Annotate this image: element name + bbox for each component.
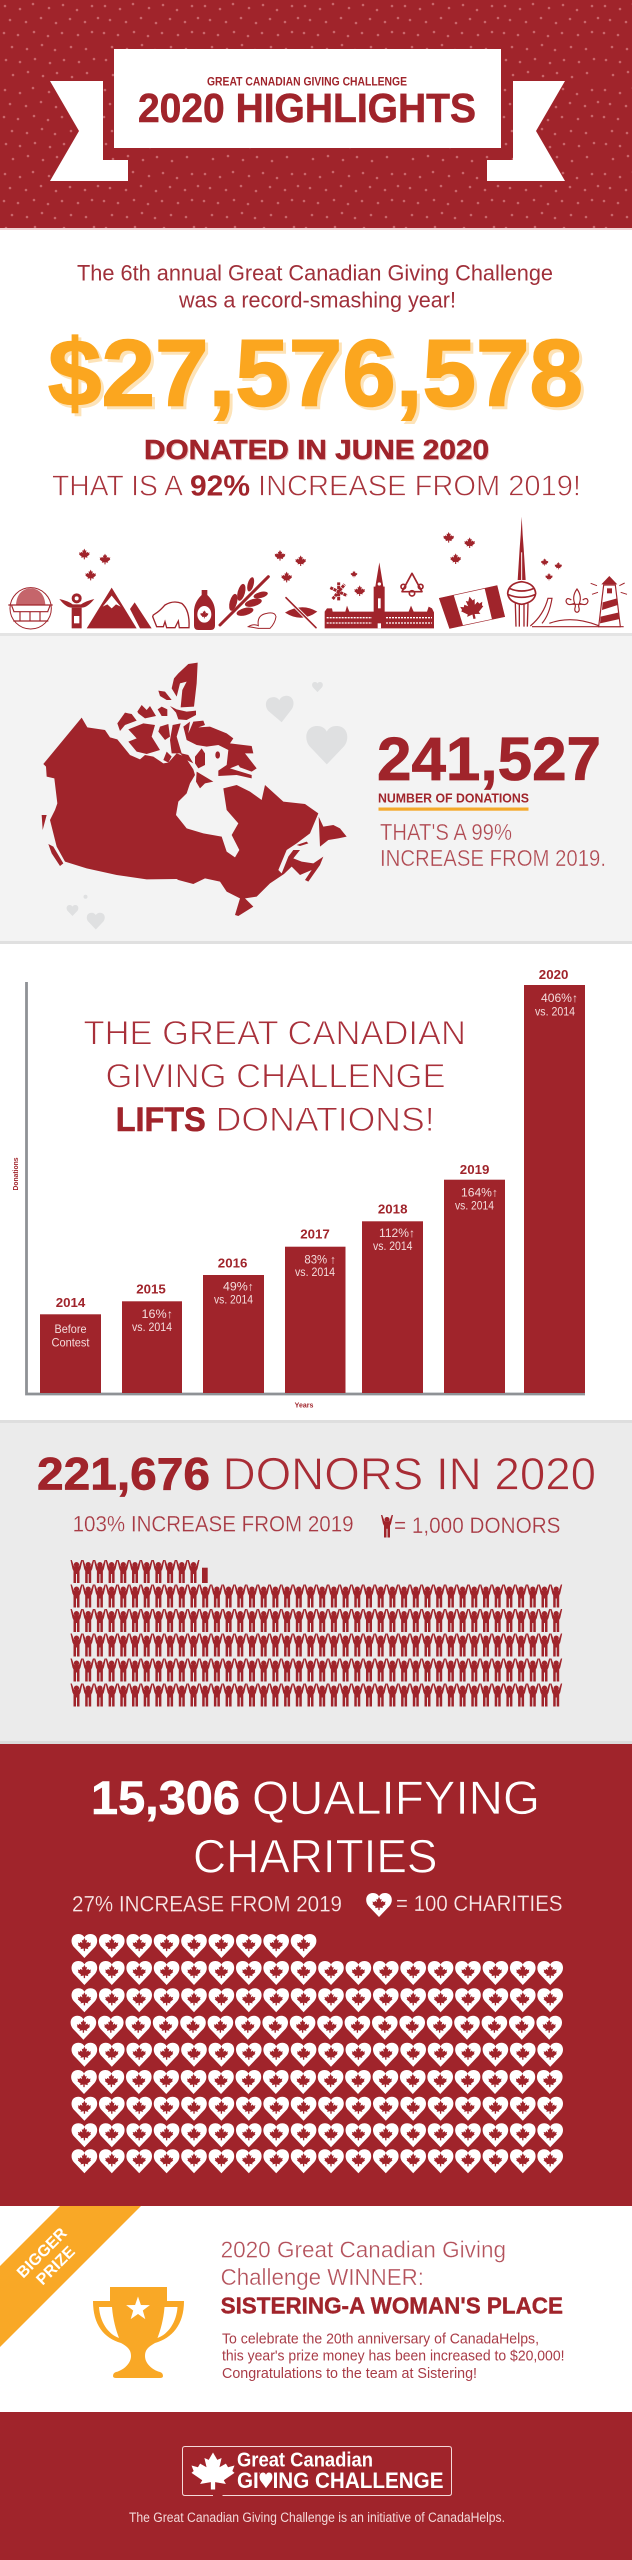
- bar 2014: [40, 1295, 101, 1393]
- bar 2016: 49%↑: [223, 1280, 254, 1294]
- icon: trophy: [93, 2287, 184, 2378]
- intro text: was a record-smashing year!: [178, 288, 456, 312]
- icon row: Canadian symbols right: [325, 517, 627, 628]
- icon: polar bear: [153, 602, 189, 628]
- icon: totem pole: [59, 593, 94, 628]
- donations label: NUMBER OF DONATIONS: [378, 790, 529, 806]
- icon: parliament: [325, 562, 434, 628]
- donations count: 241,527: [377, 725, 601, 793]
- donated line: DONATED IN JUNE 2020: [144, 434, 489, 465]
- ribbon centre panel: [114, 49, 501, 148]
- bar 2015: 16%↑: [142, 1307, 173, 1321]
- bar 2018: [362, 1202, 423, 1393]
- increase line: 92%: [190, 470, 250, 502]
- legend: equals text: = 1,000 DONORS: [394, 1513, 560, 1538]
- bar 2019: vs. 2014: [455, 1199, 494, 1213]
- icon: beaver: [248, 613, 276, 628]
- ribbon tail: right: [487, 81, 565, 181]
- footer note: The Great Canadian Giving Challenge is an initiative of CanadaHelps.: [129, 2510, 505, 2525]
- logo: [182, 2446, 452, 2496]
- axes: [26, 982, 585, 1394]
- decorative grey hearts: [67, 682, 347, 930]
- icons: falling leaves: [79, 549, 306, 582]
- legend: heart icon: [366, 1893, 392, 1917]
- donations increase text: INCREASE FROM 2019.: [380, 845, 606, 871]
- bar 2016: 2016: [218, 1256, 247, 1271]
- icon: trefoil: [401, 573, 423, 596]
- panel: bar chart: [0, 944, 632, 1420]
- bar 2019: 2019: [460, 1162, 489, 1177]
- bar 2020: vs. 2014: [535, 1004, 575, 1018]
- chart title: LIFTS: [116, 1101, 206, 1139]
- panel: number of donations: [0, 633, 632, 944]
- donors heading: DONORS IN 2020: [223, 1448, 596, 1499]
- increase line: INCREASE FROM 2019!: [258, 470, 581, 502]
- bar 2014: Before: [54, 1322, 87, 1336]
- axis label: years: Years: [295, 1403, 313, 1410]
- bar 2020: [524, 967, 585, 1393]
- header kicker: GREAT CANADIAN GIVING CHALLENGE: [207, 76, 407, 88]
- bar 2019: 164%↑: [461, 1186, 498, 1200]
- bar 2014: 2014: [56, 1295, 86, 1310]
- bar 2014: Contest: [52, 1335, 90, 1349]
- donors increase: 103% INCREASE FROM 2019: [73, 1512, 354, 1537]
- charities heading: [91, 1771, 540, 1882]
- bar 2017: 83% ↑: [304, 1252, 336, 1266]
- icon row: Canadian symbols left: [8, 549, 317, 630]
- icon: kayak: [285, 598, 317, 628]
- mainland: [43, 718, 323, 916]
- icon: Olympic stadium and hill: [530, 598, 624, 627]
- bar 2015: vs. 2014: [132, 1320, 172, 1334]
- intro text: The 6th annual Great Canadian Giving Challenge: [77, 260, 553, 286]
- winner name: SISTERING-A WOMAN'S PLACE: [221, 2292, 563, 2318]
- icon: syrup bottle: [194, 590, 215, 630]
- charities heading: QUALIFYING: [252, 1771, 540, 1824]
- winner heading: [221, 2236, 506, 2290]
- charities heading: 15,306: [91, 1771, 240, 1824]
- panel: headline total: [48, 260, 583, 502]
- bar 2018: vs. 2014: [373, 1239, 413, 1253]
- panel: donors: [0, 1420, 632, 1744]
- icon: snowflake and leaves: [330, 571, 365, 601]
- chart title: GIVING CHALLENGE: [106, 1058, 446, 1096]
- axis label: donations: Donations: [13, 1157, 20, 1190]
- chart title: [84, 1014, 466, 1139]
- charities increase: 27% INCREASE FROM 2019: [72, 1892, 342, 1917]
- bar 2015: 2015: [136, 1281, 166, 1296]
- chart title: THE GREAT CANADIAN: [84, 1014, 466, 1052]
- ribbon: bigger prize: BIGGER: [14, 2225, 71, 2282]
- bar 2015: [122, 1281, 182, 1393]
- ribbon tail: left: [50, 81, 128, 181]
- chart title: DONATIONS!: [216, 1101, 435, 1139]
- bar 2019: [444, 1162, 505, 1393]
- winner heading: Challenge WINNER:: [221, 2264, 424, 2290]
- increase line: [52, 470, 581, 502]
- winner heading: 2020 Great Canadian Giving: [221, 2236, 506, 2262]
- bar 2020: 406%↑: [541, 991, 578, 1005]
- icons: falling leaves: [443, 532, 562, 580]
- winner paragraph: [222, 2331, 564, 2382]
- pictogram: charities: [71, 1934, 563, 2173]
- total amount: $27,576,578: [48, 320, 583, 426]
- pictogram: donors: [70, 1560, 562, 1706]
- intro text: [77, 260, 553, 312]
- panel: qualifying charities: [0, 1744, 632, 2206]
- bar 2017: vs. 2014: [295, 1265, 335, 1279]
- winner paragraph: To celebrate the 20th anniversary of CanadaHelps,: [222, 2331, 539, 2347]
- bar 2018: 2018: [378, 1202, 407, 1217]
- logo: Great Canadian: [237, 2449, 373, 2472]
- icon: lighthouse: [591, 576, 627, 627]
- winner paragraph: Congratulations to the team at Sistering!: [222, 2366, 477, 2382]
- icon: CN Tower: [508, 517, 536, 627]
- icon: fleur de lis: [566, 589, 588, 612]
- logo: GIVING CHALLENGE: [237, 2468, 444, 2493]
- legend: person icon: [381, 1515, 393, 1538]
- donations increase text: [380, 819, 606, 871]
- bar 2017: [285, 1226, 346, 1393]
- ribbon: bigger prize: [0, 2206, 141, 2347]
- legend: equals text: = 100 CHARITIES: [396, 1891, 562, 1916]
- icon: mountains: [87, 588, 152, 628]
- bar 2018: 112%↑: [379, 1226, 415, 1240]
- bar 2016: [203, 1256, 264, 1393]
- panel: prize winner: [0, 2206, 632, 2412]
- orange rule: [378, 808, 528, 811]
- donors heading: 221,676: [37, 1448, 210, 1499]
- icon: Canadian flag: [439, 586, 505, 628]
- icon: biosphere dome: [8, 588, 53, 629]
- panel: header banner: [0, 0, 632, 230]
- ribbon: bigger prize: PRIZE: [33, 2243, 79, 2289]
- arctic islands: [117, 663, 257, 788]
- bar 2020: 2020: [539, 967, 568, 982]
- charities heading: CHARITIES: [193, 1829, 438, 1882]
- icon: wheat: [220, 576, 269, 625]
- donors heading: [37, 1448, 596, 1499]
- map of Canada: [42, 663, 347, 916]
- panel: footer: [0, 2412, 632, 2560]
- winner paragraph: this year's prize money has been increased to $20,000!: [222, 2349, 564, 2365]
- bar 2017: 2017: [300, 1226, 330, 1241]
- title: 2020 HIGHLIGHTS: [138, 85, 476, 131]
- Atlantic and Pacific islands: [42, 815, 347, 866]
- donations increase text: THAT'S A 99%: [380, 819, 512, 845]
- increase line: THAT IS A: [52, 470, 184, 502]
- bar 2016: vs. 2014: [214, 1293, 253, 1307]
